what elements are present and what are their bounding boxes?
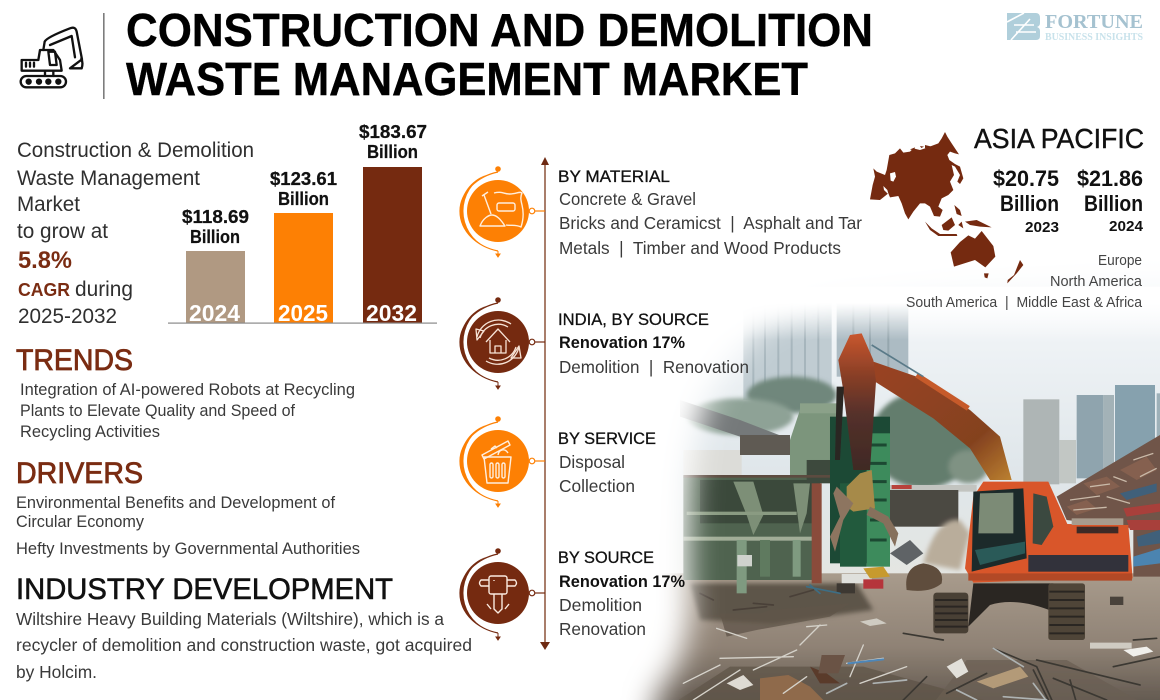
excavator boom	[873, 362, 1012, 480]
segment: india by source: Renovation 17%	[559, 334, 685, 352]
bar 2025: 2025	[278, 300, 328, 326]
segment: india by source	[558, 310, 749, 377]
icon: excavator	[21, 28, 82, 87]
segment: by material: Metals | Timber and Wood Products	[559, 238, 841, 258]
drivers section: Circular Economy	[16, 513, 145, 531]
logo: Fortune Business Insights: FORTUNE	[1045, 11, 1143, 33]
segment: by material: BY MATERIAL	[558, 167, 670, 186]
trends section: Integration of AI-powered Robots at Recycling	[20, 381, 355, 399]
intro text: market growth: Construction & Demolition	[17, 139, 254, 162]
segment: by service: Disposal	[559, 452, 625, 472]
segment: by service	[558, 429, 656, 496]
industry development section: by Holcim.	[16, 662, 97, 682]
asia pacific heading and values: $20.75	[993, 166, 1059, 191]
segment: by source: Renovation	[559, 619, 646, 639]
trends section: Recycling Activities	[20, 423, 160, 441]
foreground debris	[679, 612, 944, 700]
drivers section: Hefty Investments by Governmental Authorities	[16, 540, 360, 558]
excavator body	[965, 482, 1133, 583]
asia pacific heading and values: Billion	[1084, 191, 1143, 216]
bar 2025: Billion	[278, 188, 329, 209]
grapple	[847, 470, 875, 512]
bar 2024: 2024	[189, 300, 240, 326]
title	[126, 4, 873, 105]
logo: Fortune Business Insights	[1007, 11, 1143, 43]
asia pacific heading and values: ASIA PACIFIC	[974, 123, 1144, 154]
intro text: market growth: to grow at	[17, 220, 108, 243]
bar 2032: $183.67	[359, 121, 427, 142]
timeline axis with arrows	[540, 157, 550, 650]
segment: by material	[558, 167, 862, 258]
shredder machine	[680, 402, 779, 437]
segment: india by source: Demolition | Renovation	[559, 357, 749, 377]
segment: by source	[558, 548, 685, 639]
intro text: market growth: during	[75, 278, 133, 301]
industry development section: recycler of demolition and construction waste, got acquired	[16, 635, 472, 655]
segment: india by source: INDIA, BY SOURCE	[558, 310, 709, 329]
icon: service trash bin	[460, 416, 545, 507]
asia pacific heading and values: Billion	[1000, 191, 1059, 216]
industry development section: INDUSTRY DEVELOPMENT	[16, 573, 393, 606]
bar chart: market size	[168, 121, 437, 326]
intro text: market growth: 2025-2032	[18, 305, 117, 328]
background photo: excavator at demolition site	[634, 306, 1160, 700]
icon: source jackhammer	[460, 548, 545, 640]
icon: material sack and shovel	[460, 166, 545, 257]
other regions list	[906, 252, 1143, 311]
segment: by material: Concrete & Gravel	[559, 189, 696, 209]
other regions list: Europe	[1098, 252, 1142, 269]
divider	[103, 13, 105, 99]
excavator arm	[838, 333, 876, 470]
bar 2032	[359, 121, 427, 326]
bar 2032: 2032	[366, 300, 417, 326]
bar 2025	[270, 168, 337, 326]
intro text: market growth: Waste Management	[17, 167, 200, 190]
map: Asia Pacific	[870, 132, 1023, 283]
trends section	[16, 344, 355, 441]
industry development section: Wiltshire Heavy Building Materials (Wiltshire), which is a	[16, 609, 444, 629]
clutter near machine base	[842, 574, 872, 583]
trends section: TRENDS	[16, 344, 133, 377]
segment: by material: Bricks and Ceramicst | Asphalt and Tar	[559, 213, 862, 233]
segment: by source: BY SOURCE	[558, 548, 654, 567]
asia pacific heading and values: $21.86	[1077, 166, 1143, 191]
intro text: market growth: 5.8%	[18, 247, 72, 274]
intro text: market growth: Market	[17, 193, 80, 216]
title: WASTE MANAGEMENT MARKET	[126, 53, 808, 105]
drivers section: DRIVERS	[16, 457, 143, 490]
icon: india by source, house in recycling arrows	[460, 297, 545, 389]
segment: by source: Demolition	[559, 595, 642, 615]
bar 2024: Billion	[190, 226, 240, 247]
industry development section	[16, 573, 472, 682]
asia pacific heading and values	[974, 123, 1144, 236]
bar 2024: $118.69	[182, 206, 249, 227]
segment: by service: BY SERVICE	[558, 429, 656, 448]
drivers section: Environmental Benefits and Development of	[16, 494, 335, 512]
title: CONSTRUCTION AND DEMOLITION	[126, 4, 873, 56]
asia pacific heading and values: 2024	[1109, 218, 1144, 235]
drivers section	[16, 457, 360, 558]
segment: by source: Renovation 17%	[559, 573, 685, 591]
bar 2025: $123.61	[270, 168, 337, 189]
intro text: market growth: CAGR	[18, 280, 70, 300]
other regions list: North America	[1050, 273, 1143, 290]
tracks	[968, 583, 1053, 627]
bar 2024	[182, 206, 249, 326]
bar 2032: Billion	[367, 141, 418, 162]
logo: Fortune Business Insights: BUSINESS INSIGHTS	[1045, 32, 1143, 43]
other regions list: South America | Middle East & Africa	[906, 294, 1143, 311]
segment: by service: Collection	[559, 476, 635, 496]
asia pacific heading and values: 2023	[1025, 219, 1059, 236]
intro text: market growth	[17, 139, 254, 328]
trends section: Plants to Elevate Quality and Speed of	[20, 402, 295, 420]
